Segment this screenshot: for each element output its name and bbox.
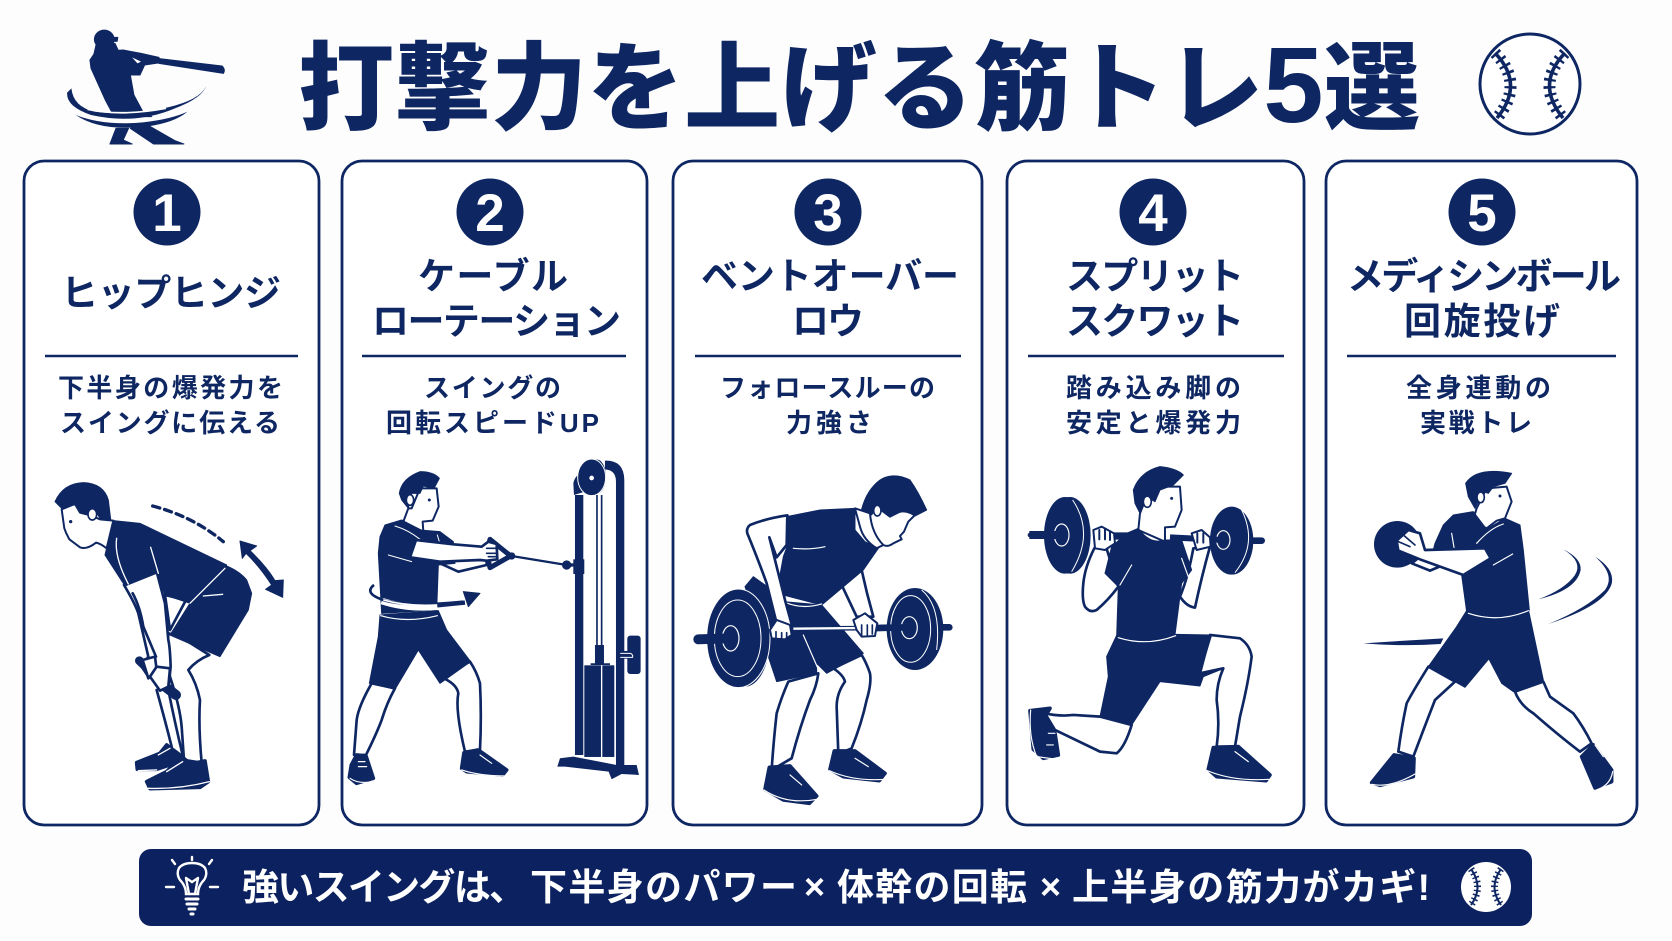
heading: bent-over row (701, 256, 959, 342)
description: hip hinge: スイングに伝える (60, 408, 280, 438)
icon: batter logo (67, 30, 224, 144)
description: split squat (1066, 373, 1241, 438)
heading: split squat (1066, 256, 1244, 342)
description: medicine ball throw: 全身連動の (1406, 373, 1551, 403)
number badge 2 (456, 178, 524, 246)
description: cable rotation: 回転スピードUP (386, 408, 599, 438)
icon: light bulb (166, 857, 218, 914)
barbell (1028, 497, 1262, 575)
number badge 5: 5 (1467, 184, 1497, 243)
panel: hip hinge (24, 161, 319, 825)
description: bent-over row: 力強さ (786, 408, 872, 438)
heading: medicine ball throw: 回旋投げ (1404, 301, 1560, 342)
description: medicine ball throw (1406, 373, 1551, 438)
title: 打撃力を上げる筋トレ5選 (298, 24, 1420, 145)
description: bent-over row: フォロースルーの (720, 373, 935, 403)
heading: split squat: スプリット (1066, 256, 1244, 297)
banner text: 体幹の回転 (837, 867, 1027, 908)
description: cable rotation: スイングの (424, 373, 561, 403)
heading: medicine ball throw: メディシンボール (1347, 255, 1621, 297)
number badge 1 (134, 178, 200, 246)
heading: hip hinge: ヒップヒンジ (61, 273, 281, 314)
banner text: × (804, 866, 825, 907)
number badge 3 (794, 178, 862, 246)
description: split squat: 踏み込み脚の (1066, 373, 1241, 403)
left weight plate (707, 589, 770, 688)
number badge 3: 3 (813, 184, 843, 243)
description: hip hinge (58, 373, 283, 438)
heading: bent-over row: ロウ (792, 301, 864, 342)
figure: bent-over row (698, 476, 949, 803)
description: bent-over row (720, 373, 935, 438)
number badge 4 (1120, 178, 1186, 246)
description: hip hinge: 下半身の爆発力を (58, 373, 283, 403)
banner text: × (1040, 866, 1061, 907)
panel: medicine ball throw (1326, 161, 1637, 825)
icon: banner baseball (1461, 862, 1511, 912)
figure: cable machine rotation (349, 459, 641, 783)
panel: bent-over row (673, 161, 982, 825)
callout: bottom banner (139, 849, 1532, 926)
banner text: 強いスイングは、 (242, 867, 526, 908)
figure: split squat (1028, 467, 1270, 781)
number badge 2: 2 (475, 184, 505, 243)
heading: split squat: スクワット (1066, 301, 1244, 342)
heading: medicine ball throw (1347, 255, 1621, 342)
banner text (242, 866, 1430, 908)
panel: split squat (1007, 161, 1304, 825)
description: split squat: 安定と爆発力 (1066, 408, 1241, 438)
heading: cable rotation (372, 255, 621, 342)
right weight plate (887, 588, 943, 670)
heading: cable rotation: ローテーション (372, 301, 621, 342)
description: medicine ball throw: 実戦トレ (1420, 408, 1532, 438)
panel: cable rotation (342, 161, 647, 825)
number badge 1: 1 (152, 184, 182, 243)
icon: baseball (1480, 34, 1580, 134)
icon: cable machine (557, 459, 641, 779)
heading: cable rotation: ケーブル (418, 255, 568, 297)
figure: medicine ball throw (1363, 471, 1613, 789)
heading: bent-over row: ベントオーバー (701, 256, 959, 297)
cable and handle (488, 539, 578, 570)
number badge 5 (1448, 178, 1516, 246)
description: cable rotation (386, 373, 599, 438)
banner text: 下半身のパワー (530, 867, 797, 908)
banner text: 上半身の筋力がカギ! (1072, 867, 1430, 908)
figure: hip hinge (55, 483, 283, 789)
number badge 4: 4 (1138, 184, 1168, 243)
